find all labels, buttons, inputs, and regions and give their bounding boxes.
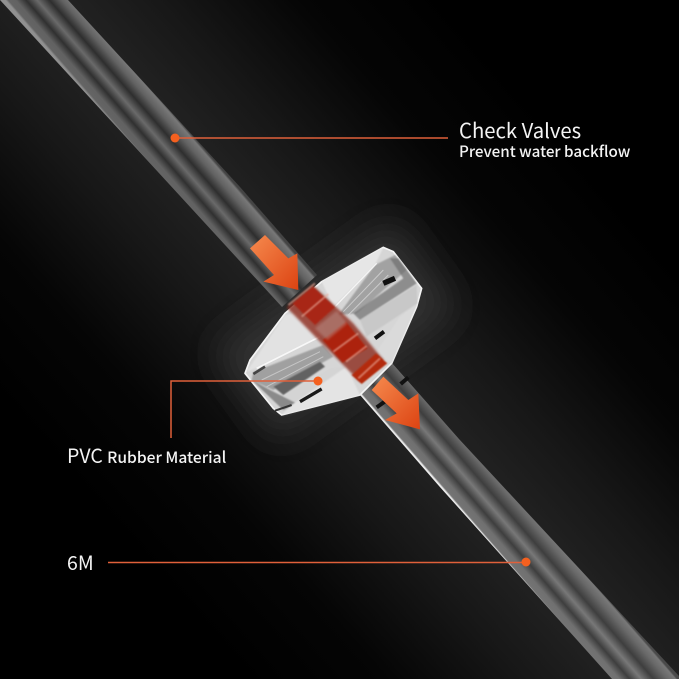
lower left glass bands xyxy=(247,310,327,372)
lower tube collar xyxy=(377,377,408,407)
outlet arrow xyxy=(372,377,420,429)
text: prevent water backflow: Prevent water backflow xyxy=(459,140,630,162)
upper tube xyxy=(0,0,317,307)
red hub xyxy=(287,283,387,384)
label: 6M: 6M xyxy=(67,547,94,576)
inlet arrow xyxy=(250,235,298,290)
label: PVC rubber material: PVC Rubber Material xyxy=(67,440,226,469)
valve body xyxy=(245,235,422,429)
upper right glass bands xyxy=(322,247,383,307)
heading: check valves: Check Valves xyxy=(459,114,581,144)
lower tube xyxy=(360,363,679,679)
